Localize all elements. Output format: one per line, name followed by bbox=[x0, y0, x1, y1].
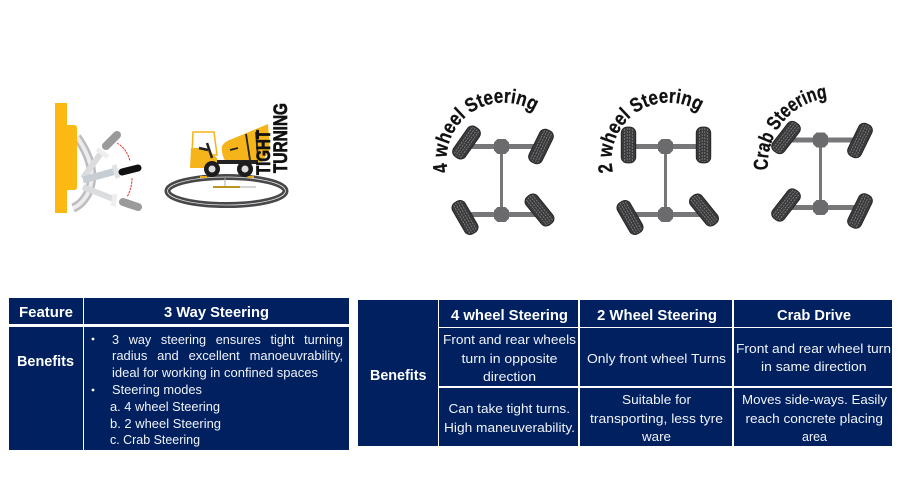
icon: tight turning mixer bbox=[168, 103, 292, 205]
curved label: Crab Steering bbox=[754, 88, 826, 170]
header: 4 wheel steering: 4 wheel Steering bbox=[451, 308, 568, 324]
lower lever bbox=[83, 187, 116, 200]
tyres bbox=[450, 124, 483, 161]
benefits text: Steering modes bbox=[112, 383, 202, 397]
icon: steering lever bbox=[55, 103, 138, 213]
middle lever bbox=[83, 171, 116, 180]
header cell: 3 way steering bbox=[84, 298, 349, 324]
cell: 4 wheel benefit: Can take tight turns. bbox=[448, 402, 570, 416]
cell: 2 wheel movement bbox=[580, 328, 732, 386]
benefits text: 3 way steering ensures tight turning bbox=[112, 333, 343, 347]
header cell: feature: Feature bbox=[19, 305, 73, 321]
chassis bbox=[630, 146, 704, 214]
cab bbox=[192, 132, 217, 155]
cell: 4 wheel movement: Front and rear wheels bbox=[443, 333, 576, 347]
cell: 2 wheel benefit: ware bbox=[641, 430, 671, 444]
diagram: 2 wheel steering bbox=[598, 88, 719, 235]
header: crab drive: Crab Drive bbox=[777, 308, 851, 324]
header cell: 3 way steering: 3 Way Steering bbox=[164, 305, 269, 321]
tyres bbox=[769, 119, 803, 156]
row label: benefits: Benefits bbox=[17, 354, 74, 370]
row label: benefits: Benefits bbox=[370, 368, 426, 384]
cell: 2 wheel benefit bbox=[580, 388, 732, 446]
cell: crab benefit: area bbox=[802, 430, 827, 444]
diagram: crab steering bbox=[754, 88, 873, 229]
cell: 4 wheel benefit: High maneuverability. bbox=[444, 421, 575, 435]
row label: benefits bbox=[9, 327, 83, 450]
cell: crab movement bbox=[734, 328, 892, 386]
steering wheel ring bbox=[73, 137, 92, 208]
cell: crab movement: Front and rear wheel turn bbox=[736, 342, 891, 356]
header: 4 wheel steering bbox=[439, 300, 578, 327]
yellow mount bbox=[55, 103, 77, 213]
cell: crab movement: in same direction bbox=[761, 360, 867, 374]
header: 2 wheel steering bbox=[580, 300, 732, 327]
cell: 4 wheel movement: direction bbox=[483, 370, 536, 384]
benefits text bbox=[84, 327, 349, 450]
cell: 2 wheel movement: Only front wheel Turns bbox=[587, 352, 726, 366]
cell: 2 wheel benefit: Suitable for bbox=[622, 393, 691, 407]
direction arrows bbox=[117, 143, 132, 197]
cell: crab benefit: Moves side-ways. Easily bbox=[742, 393, 888, 407]
benefits text: ideal for working in confined spaces bbox=[112, 366, 318, 380]
chassis bbox=[470, 146, 541, 214]
turning track bbox=[168, 177, 286, 205]
chassis bbox=[786, 140, 860, 208]
curved label: 4 wheel Steering bbox=[432, 88, 538, 173]
curved label: 2 wheel Steering bbox=[598, 88, 704, 173]
benefits text: radius and excellent manoeuvrability, bbox=[112, 349, 343, 363]
tight turning label: TIGHT bbox=[254, 130, 275, 175]
row label: benefits bbox=[358, 300, 438, 446]
cell: 4 wheel movement: turn in opposite bbox=[462, 352, 558, 366]
cell: 4 wheel benefit bbox=[439, 388, 578, 446]
benefits text: b. 2 wheel Steering bbox=[110, 417, 221, 431]
panel: 3 way steering table bbox=[9, 298, 349, 450]
header cell: feature bbox=[9, 298, 83, 324]
cell: crab benefit bbox=[734, 388, 892, 446]
benefits text: c. Crab Steering bbox=[110, 433, 200, 447]
benefits text: a. 4 wheel Steering bbox=[110, 400, 220, 414]
cell: crab benefit: reach concrete placing bbox=[746, 412, 883, 426]
cell: 4 wheel movement bbox=[439, 328, 578, 386]
upper lever bbox=[83, 153, 101, 178]
header: 2 wheel steering: 2 Wheel Steering bbox=[597, 308, 717, 324]
diagram: 4 wheel steering bbox=[432, 88, 554, 235]
tyres bbox=[621, 127, 636, 163]
wheels bbox=[204, 161, 220, 177]
panel: steering modes comparison table bbox=[358, 300, 892, 446]
header: crab drive bbox=[734, 300, 892, 327]
icon: tight turning mixer: TURNING bbox=[271, 103, 292, 173]
drum bbox=[222, 124, 270, 162]
cell: 2 wheel benefit: transporting, less tyre bbox=[590, 412, 723, 426]
